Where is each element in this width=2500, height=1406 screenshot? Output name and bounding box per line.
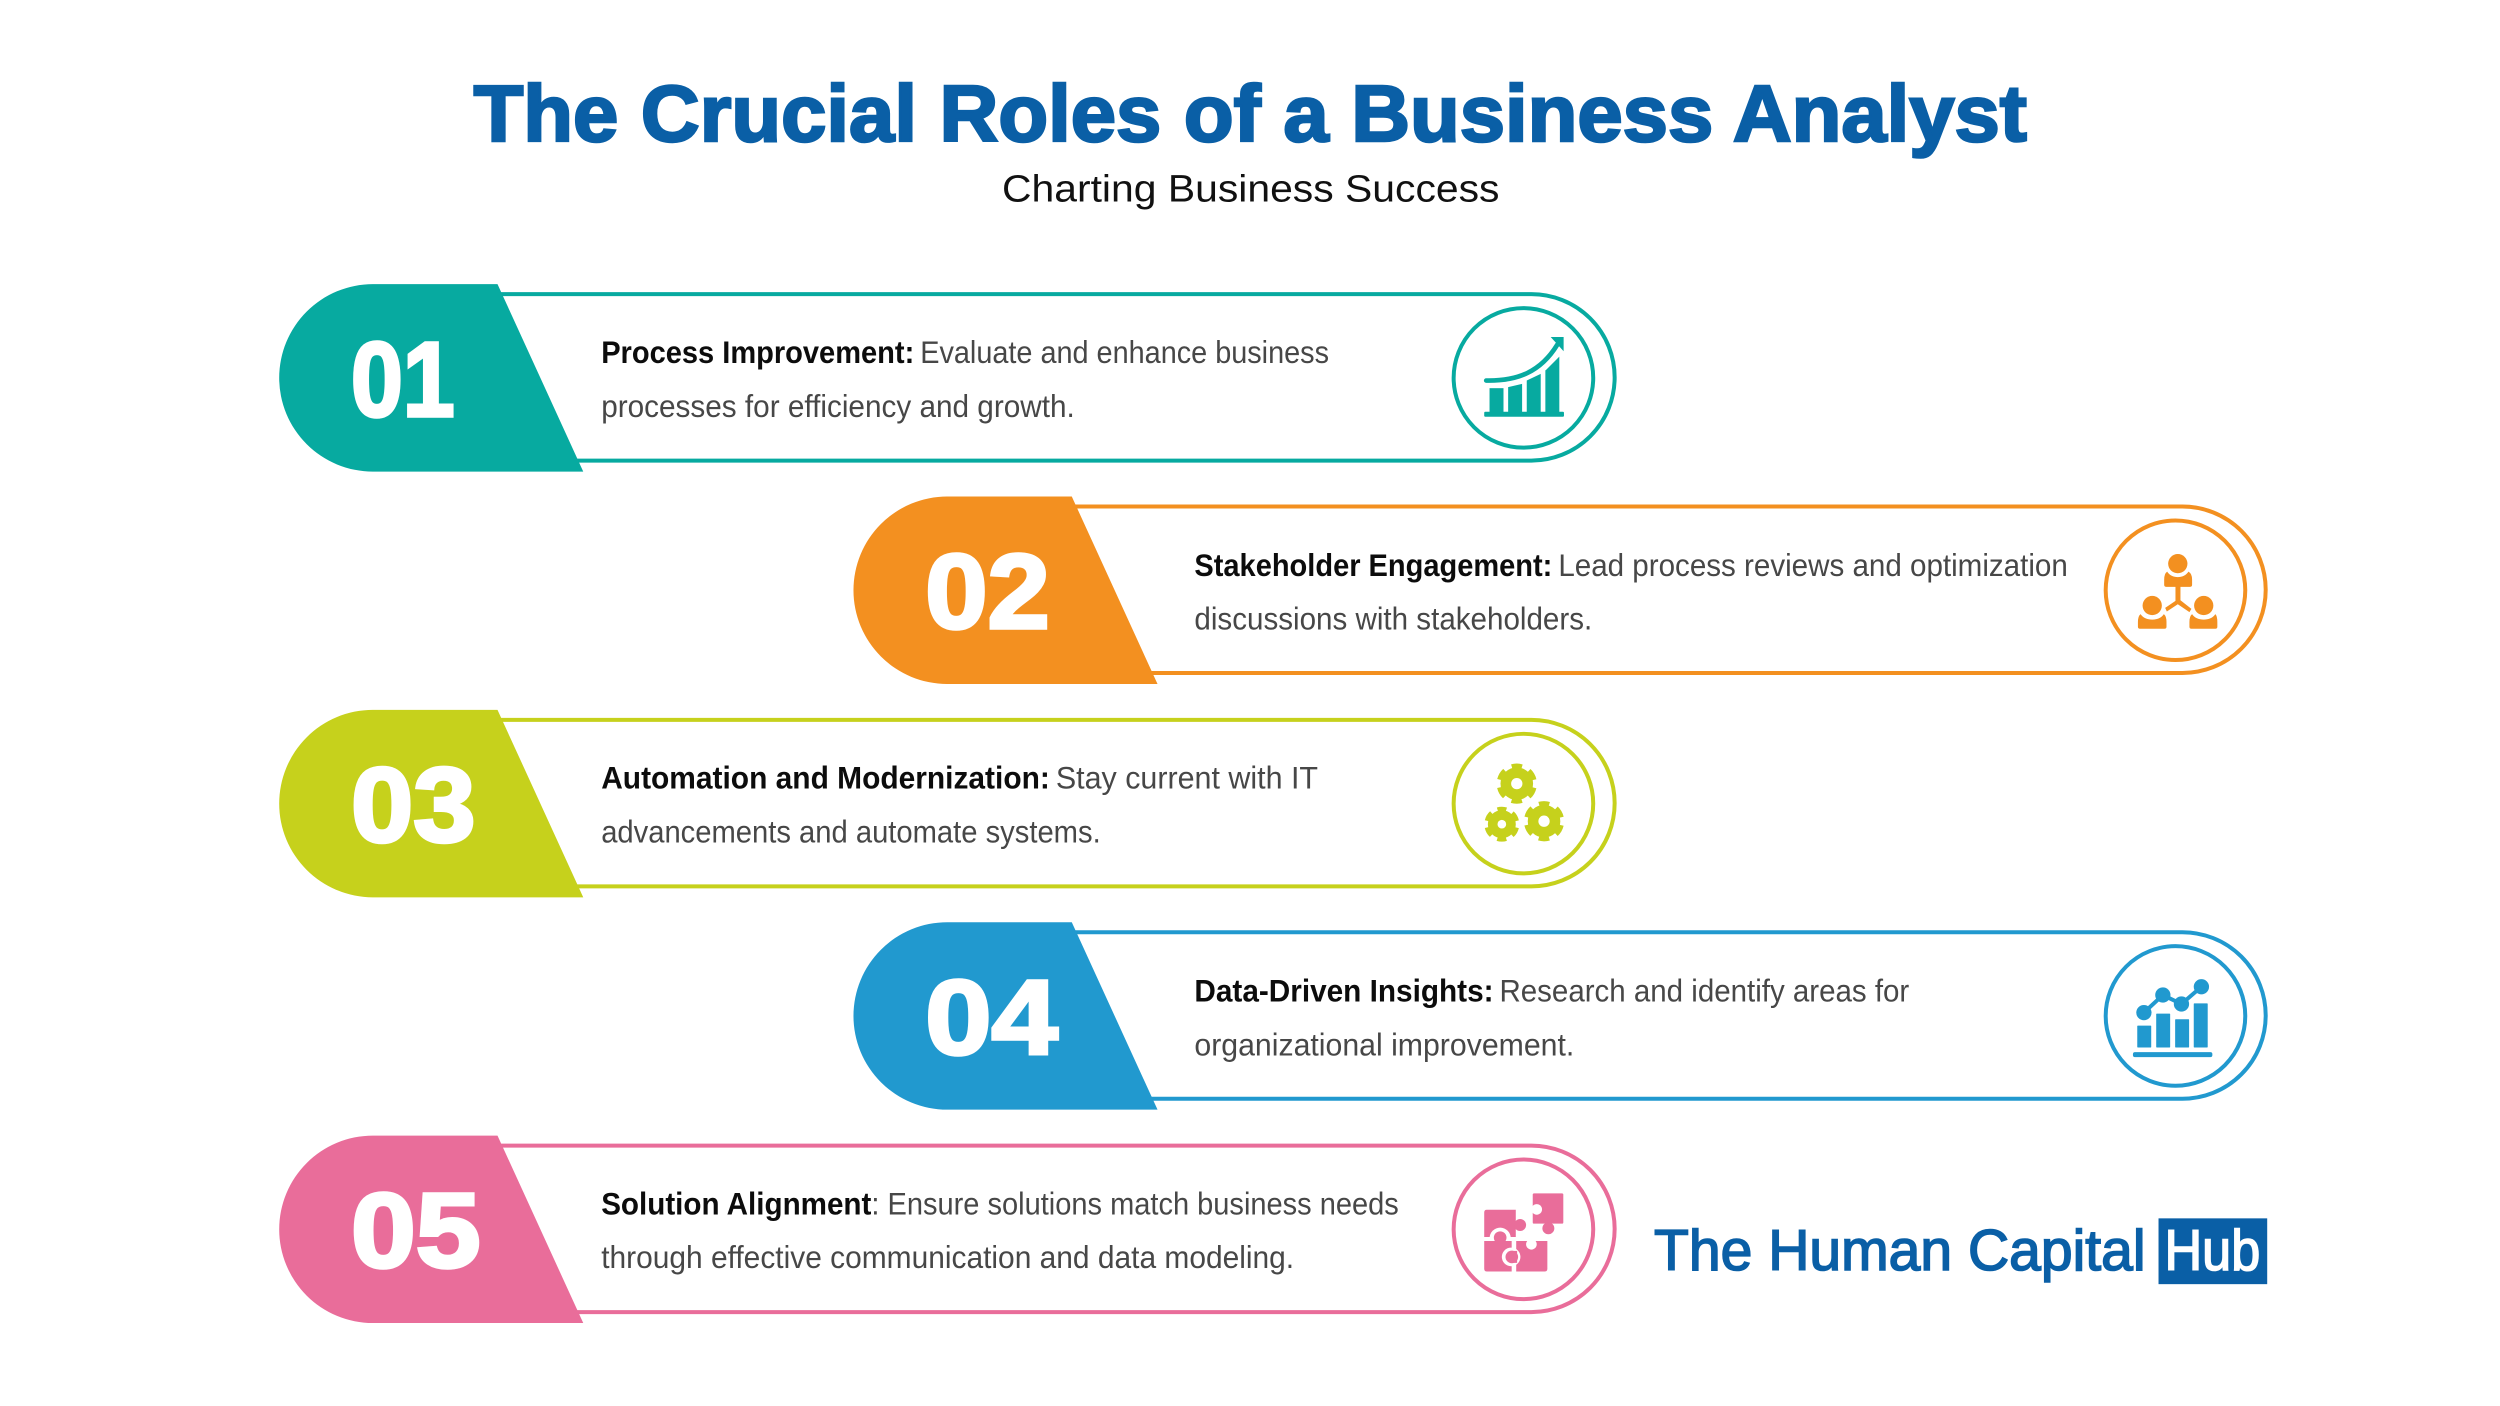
text: stakeholder engagement: discussions with stakeholders. (1194, 601, 1592, 637)
text: stakeholder engagement: Lead process reviews and optimization (1558, 547, 2068, 583)
text: data-driven insights: Research and identify areas for (1500, 973, 1910, 1009)
icon: gears (1454, 734, 1593, 873)
icon: growth chart (1454, 308, 1593, 448)
number tab (279, 710, 583, 897)
text: process improvement: Process Improvement: (601, 334, 914, 370)
outline pill (1072, 506, 2266, 673)
icon: bar and line chart (2106, 946, 2245, 1086)
text: data-driven insights: organizational improvement. (1194, 1026, 1574, 1062)
panel: 01 process improvement (279, 284, 1615, 472)
number tab (279, 284, 583, 472)
number tab (853, 922, 1158, 1110)
number: 02 (925, 533, 1050, 651)
text: data-driven insights: Data-Driven Insights: (1194, 973, 1494, 1009)
text: solution alignment: Solution Alignment (601, 1185, 872, 1221)
text: process improvement: Evaluate and enhance business (920, 334, 1329, 370)
number: 03 (351, 746, 476, 864)
text: automation and modernization: advancements and automate systems. (601, 813, 1101, 849)
logo: The Human Capital Hub (1654, 1218, 2267, 1284)
panel: 02 stakeholder engagement (853, 497, 2266, 684)
title: The Crucial Roles of a Business Analyst (474, 69, 2027, 158)
icon: puzzle pieces (1454, 1160, 1593, 1299)
text: solution alignment (601, 1185, 1399, 1275)
text: solution alignment: through effective communication and data modeling. (601, 1239, 1294, 1275)
logo hub text: Hub (2165, 1219, 2260, 1283)
text: stakeholder engagement: Stakeholder Engagement: (1194, 547, 1552, 583)
text: automation and modernization (601, 760, 1318, 849)
number tab (279, 1136, 583, 1323)
panel: 04 data-driven insights (853, 922, 2266, 1110)
number: 01 (351, 321, 455, 439)
panel: 03 automation and modernization (279, 710, 1615, 897)
subtitle: Charting Business Success (1002, 168, 1500, 210)
outline pill (498, 720, 1615, 886)
number: 05 (351, 1172, 481, 1290)
outline pill (498, 294, 1615, 461)
number tab (853, 497, 1158, 684)
icon: connected people (2106, 520, 2245, 660)
logo wordmark: The Human Capital (1654, 1219, 2146, 1283)
number: 04 (925, 959, 1058, 1077)
outline pill (1072, 932, 2266, 1099)
outline pill (498, 1146, 1615, 1312)
logo box (2159, 1218, 2267, 1284)
text: stakeholder engagement (1194, 547, 2068, 637)
panel: 05 solution alignment (279, 1136, 1615, 1323)
text: automation and modernization: Automation and Modernization: (601, 760, 1050, 796)
text: data-driven insights (1194, 973, 1910, 1062)
text: process improvement (601, 334, 1329, 424)
text: process improvement: processes for efficiency and growth. (601, 388, 1075, 424)
text: automation and modernization: Stay current with IT (1056, 760, 1318, 796)
text: solution alignment: : Ensure solutions match business needs (871, 1185, 1399, 1221)
